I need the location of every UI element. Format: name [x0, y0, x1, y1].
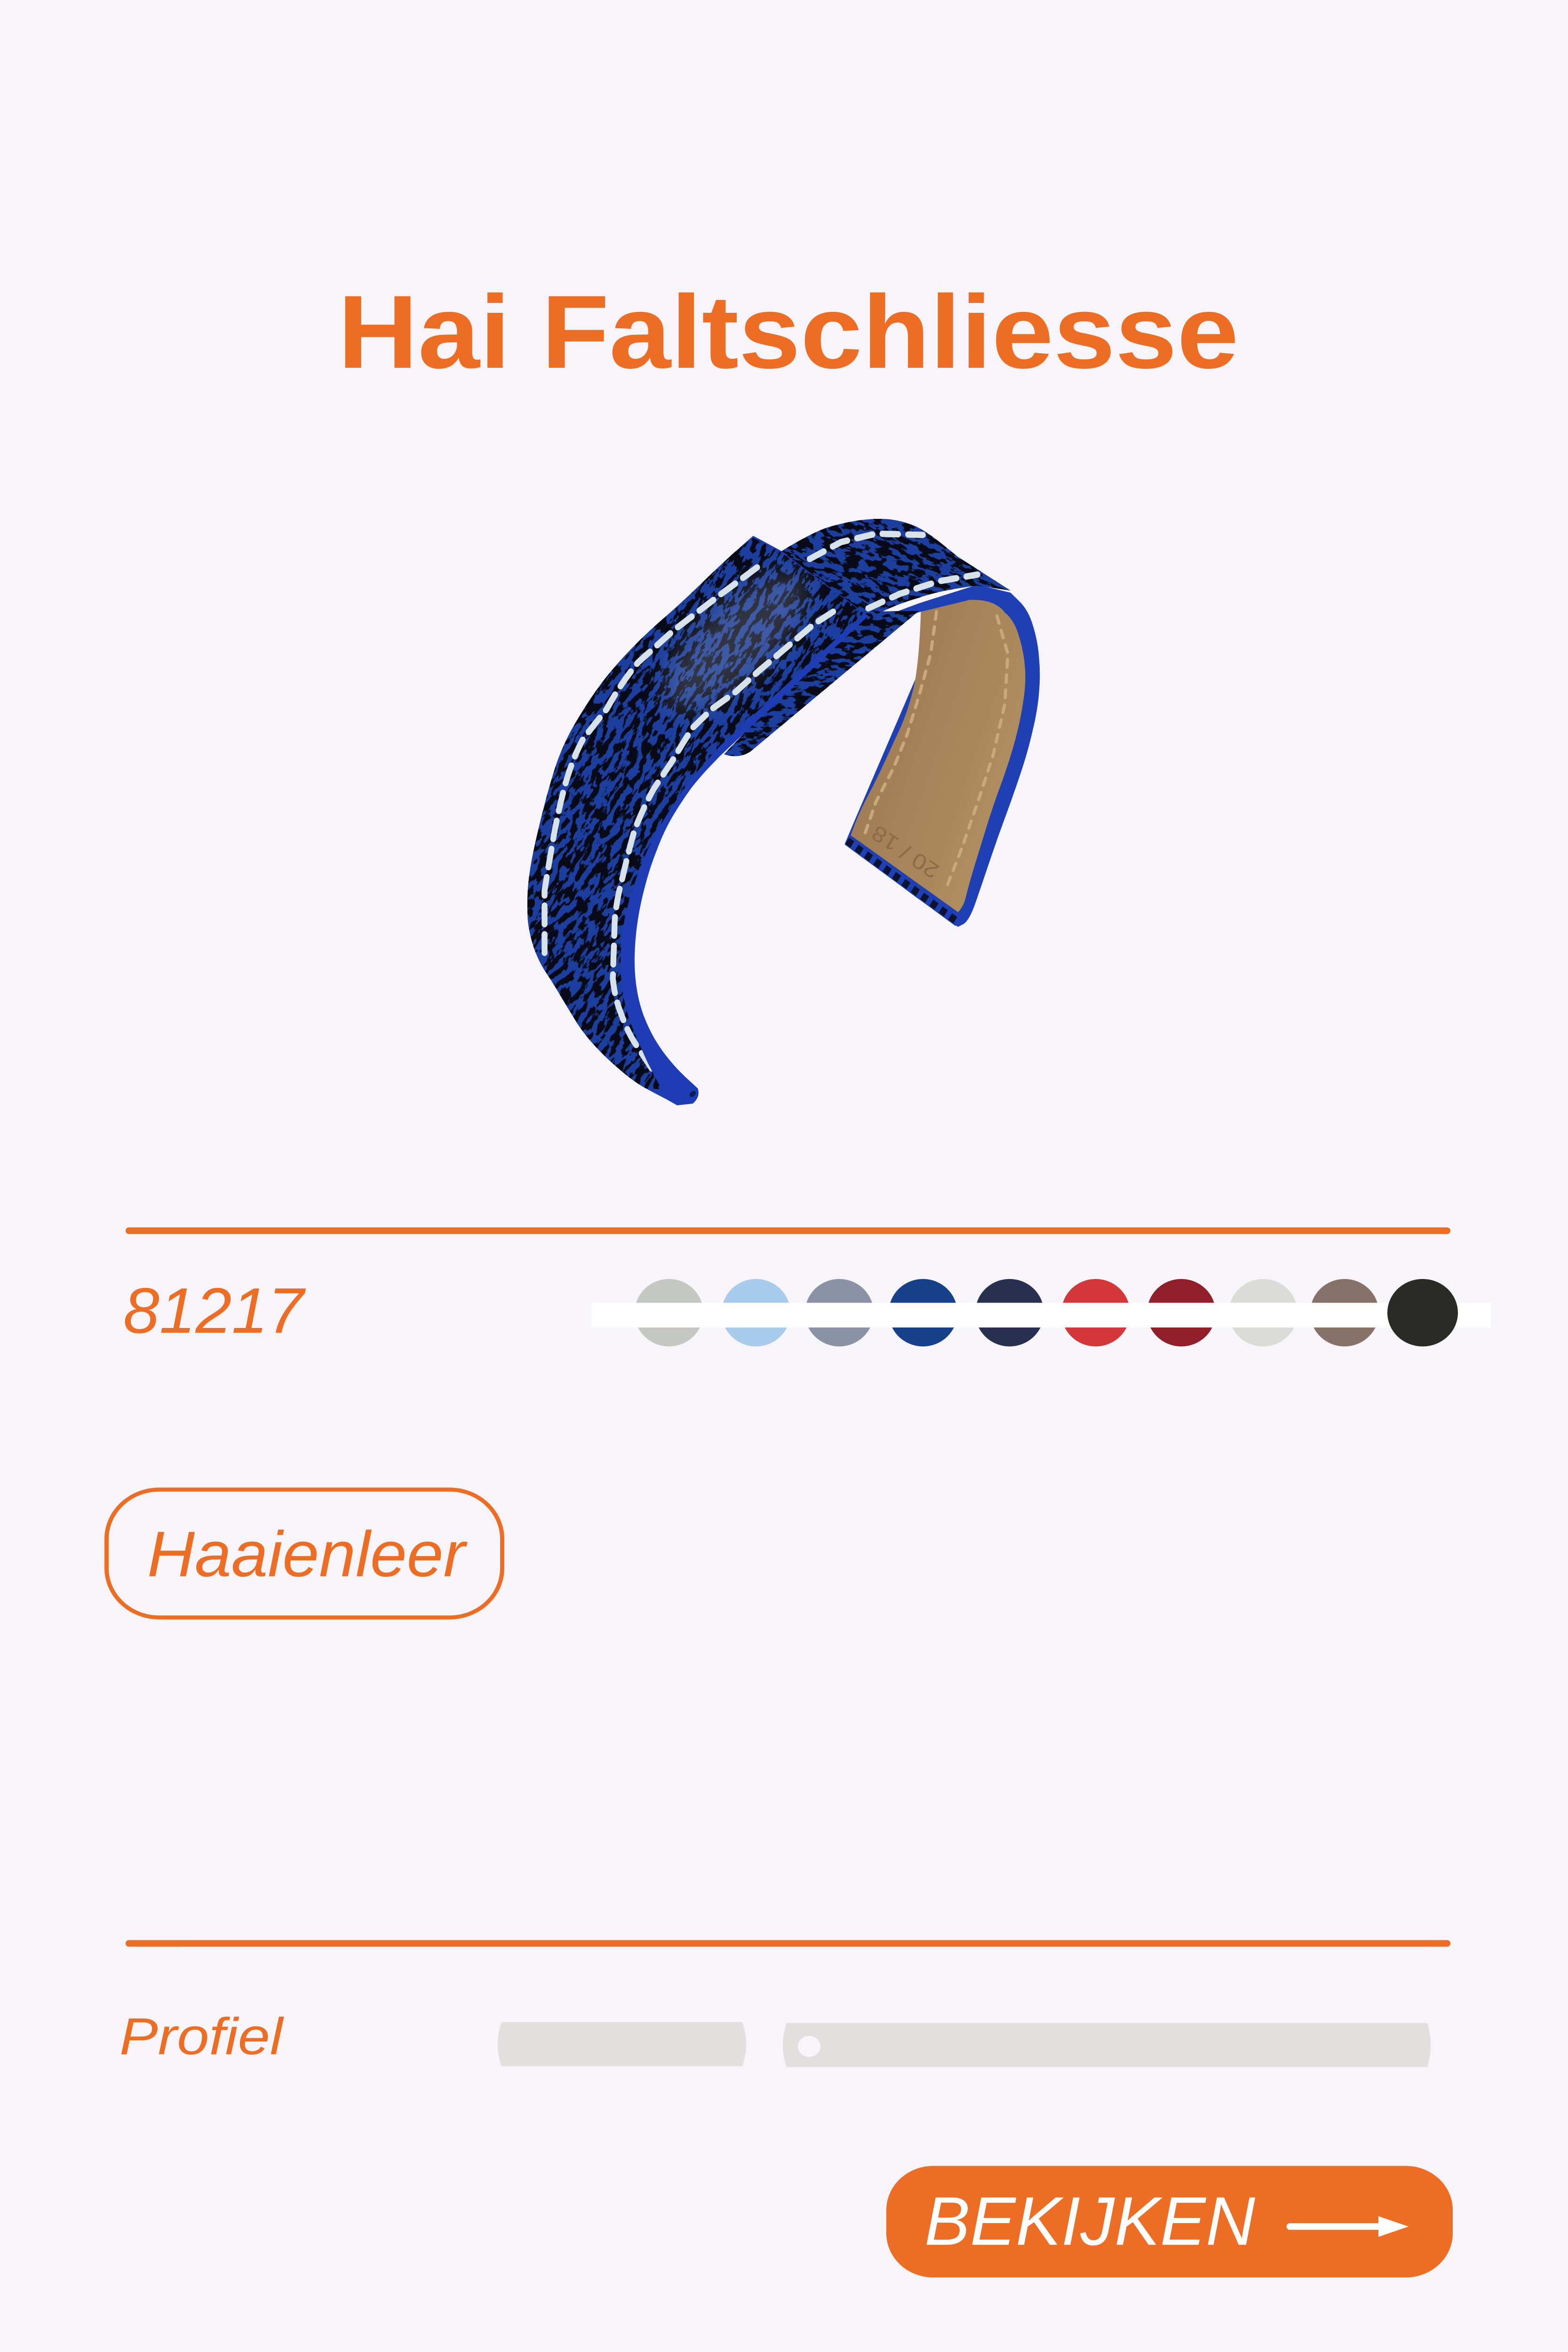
view button [886, 2166, 1453, 2278]
main strap leather surface [527, 538, 864, 1089]
material tag [106, 1490, 502, 1617]
profile bar: short section [498, 2022, 746, 2066]
lining stitches [864, 612, 1008, 886]
title: Hai Faltschliesse [338, 274, 1239, 390]
profile bar: long section [783, 2023, 1431, 2067]
underside strap section [724, 611, 919, 756]
leather sheen [657, 564, 815, 718]
main strap body edge [527, 536, 868, 1105]
upper strap stitches [810, 533, 978, 608]
strap lining [851, 600, 1026, 912]
tip hole [689, 1089, 697, 1098]
strap tail edge [845, 585, 1040, 927]
material label: Haaienleer [147, 1518, 468, 1590]
article number: 81217 [123, 1274, 306, 1346]
arrow [1286, 2216, 1409, 2237]
swatch bar [591, 1303, 1491, 1327]
strap cut end [847, 841, 958, 922]
lining size mark: 20 / 18 [868, 820, 943, 883]
profile label: Profiel [119, 2008, 284, 2066]
main strap stitches [545, 567, 833, 1072]
product photo: blue shark leather watch strap [527, 519, 1040, 1105]
button label: BEKIJKEN [924, 2183, 1256, 2260]
selected swatch [1387, 1279, 1458, 1346]
upper strap section [781, 519, 1011, 621]
bottom divider [126, 1940, 1450, 1947]
colour swatches [591, 1279, 1491, 1346]
buckle hole [798, 2036, 820, 2057]
top divider [126, 1227, 1450, 1234]
